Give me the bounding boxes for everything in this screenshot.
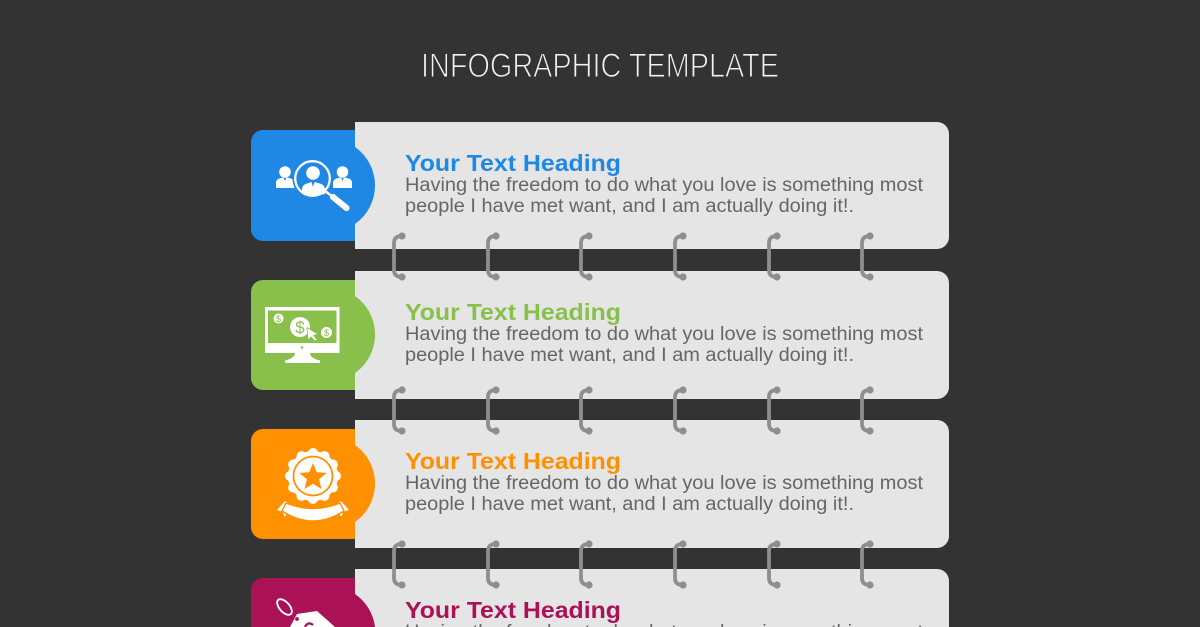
card: step 2 bbox=[355, 271, 949, 399]
title: INFOGRAPHIC TEMPLATE bbox=[421, 47, 779, 85]
panel: step 1 bbox=[251, 122, 949, 249]
binding rings: row 3 bbox=[394, 540, 874, 589]
panel: step 2 bbox=[251, 271, 949, 399]
body text: step 3: Having the freedom to do what you love is something most bbox=[405, 473, 924, 494]
body text: step 2: Having the freedom to do what you love is something most bbox=[405, 324, 924, 345]
icon: monitor with dollar: $ bbox=[324, 328, 329, 338]
heading: step 2: Your Text Heading bbox=[405, 299, 621, 325]
card: step 3 bbox=[355, 420, 949, 548]
panel: step 4 bbox=[251, 569, 949, 627]
body text: step 1: Having the freedom to do what you love is something most bbox=[405, 175, 924, 196]
binding rings: row 2 bbox=[394, 386, 874, 435]
icon: price tag bbox=[274, 597, 335, 627]
body text: step 1 bbox=[405, 175, 924, 217]
body text: step 3: people I have met want, and I am actually doing it!. bbox=[405, 494, 854, 515]
heading: step 1: Your Text Heading bbox=[405, 150, 621, 176]
body text: step 2: people I have met want, and I am actually doing it!. bbox=[405, 345, 854, 366]
body text: step 1: people I have met want, and I am actually doing it!. bbox=[405, 196, 854, 217]
heading: step 4: Your Text Heading bbox=[405, 597, 621, 623]
icon: monitor with dollar: $ bbox=[276, 314, 281, 324]
icon: monitor with dollar: $ bbox=[295, 318, 305, 337]
binding rings: row 1 bbox=[394, 232, 874, 281]
icon: award badge bbox=[277, 448, 349, 521]
heading: step 3: Your Text Heading bbox=[405, 448, 621, 474]
card: step 4 bbox=[355, 569, 949, 627]
tab: magenta bbox=[251, 578, 375, 627]
tab: blue bbox=[251, 130, 376, 241]
body text: step 3 bbox=[405, 473, 924, 515]
card: step 1 bbox=[355, 122, 949, 249]
tab: green bbox=[251, 280, 376, 390]
body text: step 2 bbox=[405, 324, 924, 366]
icon: monitor with dollar bbox=[265, 307, 340, 363]
icon: people search bbox=[276, 159, 352, 208]
tab: orange bbox=[251, 429, 376, 539]
panel: step 3 bbox=[251, 420, 949, 548]
